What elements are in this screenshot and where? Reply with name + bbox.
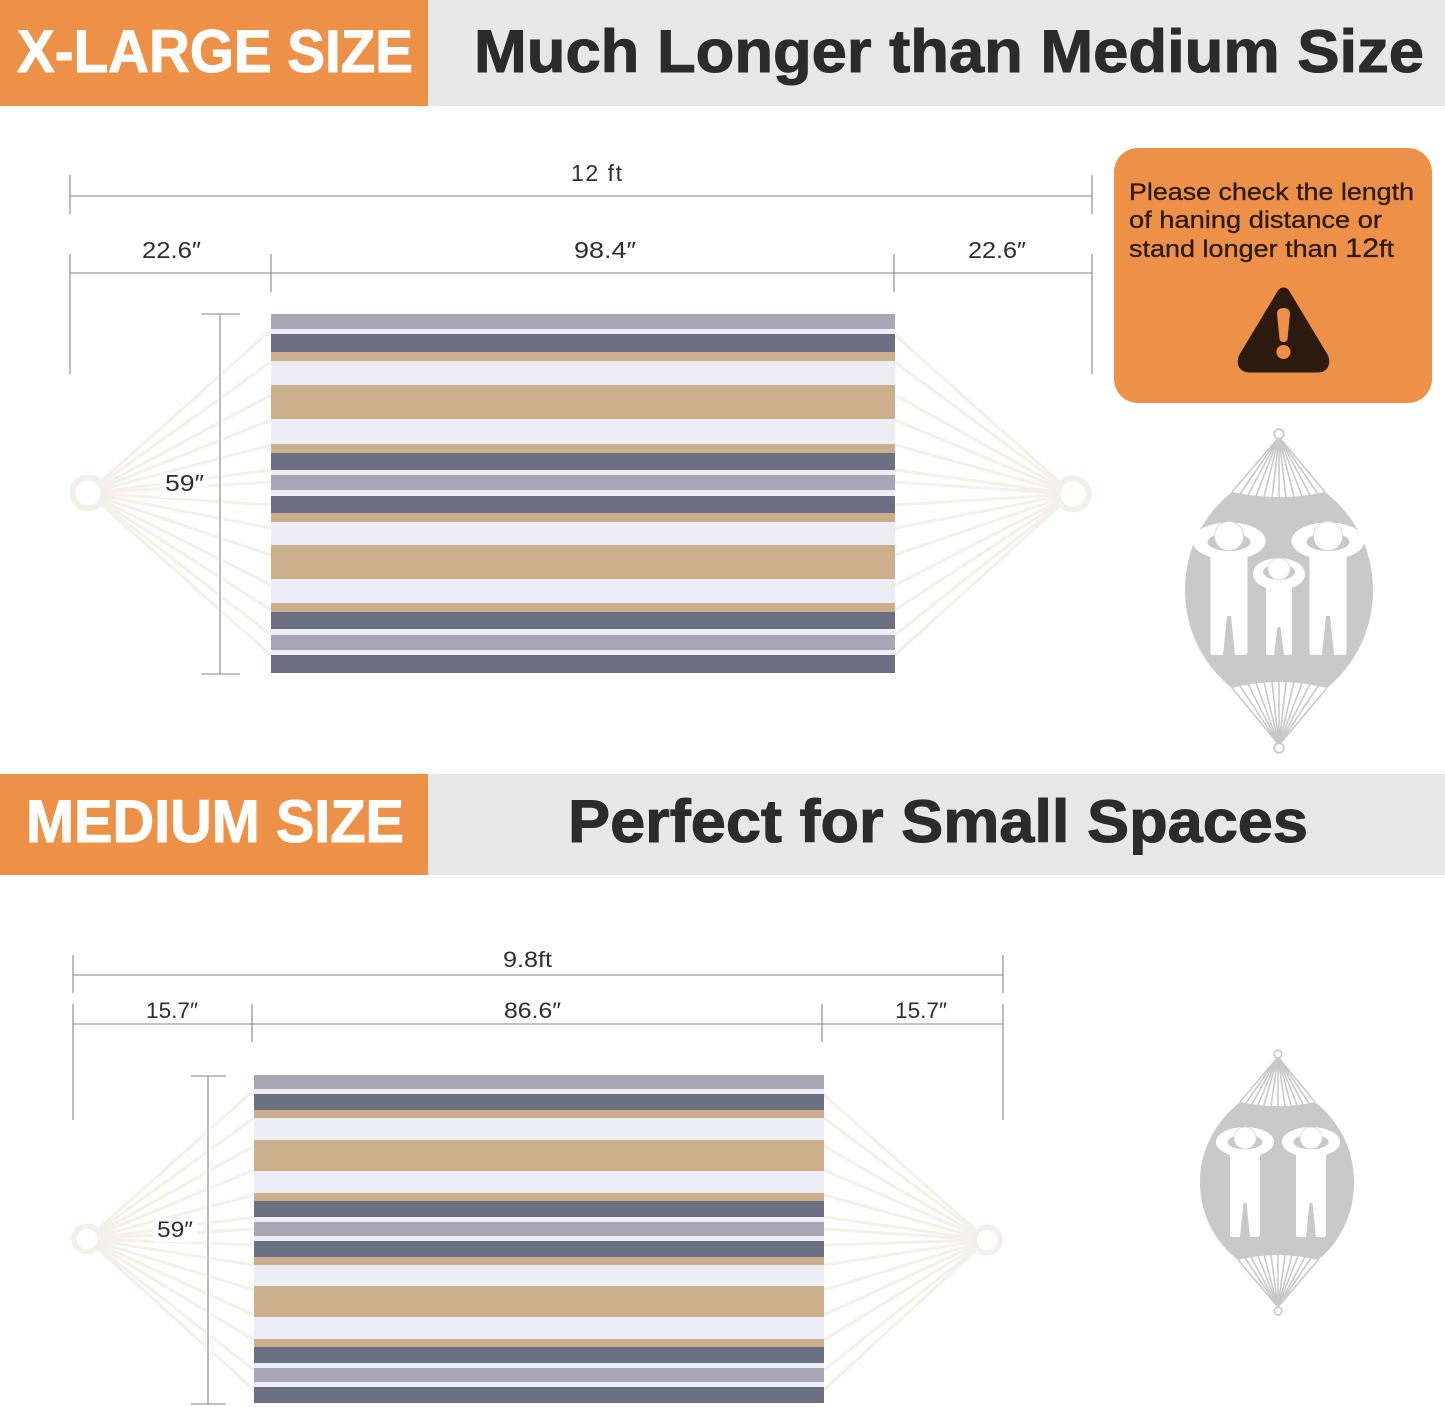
person right [1292, 522, 1364, 655]
medium hammock ropes and rings [74, 1090, 1000, 1390]
heading: MEDIUM SIZE: MEDIUM SIZE [26, 788, 404, 855]
callout text: Please check the length [1129, 179, 1414, 206]
callout text: stand longer than 12ft [1129, 233, 1394, 263]
x-large hammock striped bed [271, 314, 895, 673]
icon: warning triangle [1244, 294, 1323, 366]
label: 22.6 left: 22.6″ [142, 237, 201, 263]
label: 22.6 right: 22.6″ [968, 237, 1026, 263]
label: 15.7 left: 15.7″ [146, 998, 198, 1023]
person left [1192, 522, 1266, 655]
person left [1216, 1127, 1274, 1237]
header: medium size [0, 774, 1445, 875]
callout text [1129, 179, 1414, 263]
callout: check hanging distance [1114, 148, 1432, 403]
label: 15.7 right: 15.7″ [895, 998, 947, 1023]
label: 59 medium: 59″ [157, 1217, 193, 1242]
medium dimension lines [73, 955, 1003, 1405]
label: 12 ft: 12 ft [571, 160, 623, 186]
heading: Much Longer than Medium Size: Much Longer than Medium Size [474, 18, 1424, 85]
label: 98.4: 98.4″ [574, 237, 636, 263]
label: 86.6: 86.6″ [504, 998, 561, 1023]
person child [1253, 558, 1305, 655]
icon: x-large hammock top view with three people [1185, 429, 1373, 753]
heading: Perfect for Small Spaces: Perfect for Small Spaces [568, 788, 1308, 855]
medium hammock striped bed [254, 1075, 824, 1403]
header: x-large size [0, 0, 1445, 106]
label: 9.8ft: 9.8ft [503, 947, 552, 972]
heading: X-LARGE SIZE: X-LARGE SIZE [17, 18, 413, 85]
label: 59 x-large: 59″ [165, 470, 204, 496]
callout text: of haning distance or [1129, 207, 1382, 234]
icon: medium hammock top view with two people [1200, 1050, 1354, 1315]
x-large dimension lines [70, 175, 1092, 674]
person right [1282, 1127, 1340, 1237]
x-large hammock ropes and rings [72, 330, 1088, 655]
